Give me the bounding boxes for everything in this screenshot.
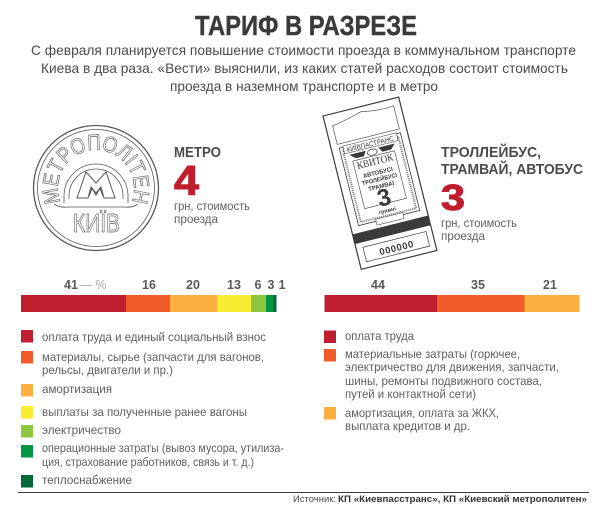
transport legend: шины, ремонты подвижного состава, [345, 374, 542, 388]
transport legend: выплата кредитов и др. [345, 419, 470, 433]
transport price caption: грн, стоимость [441, 216, 517, 230]
transport legend: материальные затраты (горючее, [345, 347, 520, 361]
metro legend [21, 330, 284, 488]
metro bar values: 41 [64, 278, 78, 292]
transport bar values [371, 278, 557, 292]
metro legend: операционные затраты (вывоз мусора, утилиза- [42, 441, 284, 455]
source: КП «Киевпасстранс», КП «Киевский метрополитен» [338, 494, 587, 505]
title: ТАРИФ В РАЗРЕЗЕ [195, 10, 417, 41]
transport legend: электричество для движения, запчасти, [345, 360, 559, 374]
intro text: проезда в наземном транспорте и в метро [170, 78, 438, 94]
transport bar values: 44 [371, 278, 385, 292]
icon: ticket [323, 97, 437, 269]
transport bar values: 35 [471, 278, 485, 292]
metro heading: МЕТРО [174, 144, 221, 161]
icon: ticket: гривні [378, 206, 397, 216]
transport legend: путей и контактной сети) [345, 387, 476, 401]
metro bar values: 1 [279, 278, 286, 292]
metro bar values: 20 [186, 278, 200, 292]
icon: ticket: 3 [374, 183, 394, 213]
metro stacked bar [21, 295, 276, 312]
metro price: 4 [174, 157, 200, 204]
transport legend [324, 329, 559, 433]
icon: ticket: ТРОЛЕЙБУСІ [361, 171, 398, 187]
intro text [31, 42, 576, 94]
metro bar values [64, 278, 286, 292]
metro bar values: 16 [142, 278, 156, 292]
icon: ticket: ТРАМВАЇ [368, 180, 395, 193]
metro legend: теплоснабжение [42, 473, 132, 487]
icon: ticket: АВТОБУСІ [362, 167, 394, 180]
metro legend: ция, страхование работников, связь и т. д.) [42, 455, 254, 469]
intro text: С февраля планируется повышение стоимости проезда в коммунальном транспорте [31, 42, 576, 58]
metro bar values: 13 [227, 278, 241, 292]
ticket number: 000000 [378, 239, 415, 258]
metro legend: рельсы, двигатели и пр.) [42, 363, 173, 377]
source: Источник: [293, 494, 336, 505]
metro legend: материалы, сырье (запчасти для вагонов, [42, 350, 264, 364]
transport price caption: проезда [441, 229, 485, 243]
transport legend: амортизация, оплата за ЖКХ, [345, 406, 499, 420]
metro price caption: грн, стоимость [174, 199, 250, 213]
ticket stripe [353, 216, 431, 244]
transport price: 3 [441, 177, 465, 218]
metro legend: электричество [42, 423, 121, 437]
metro price caption: проезда [174, 212, 218, 226]
metro legend: амортизация [42, 382, 112, 396]
transport price caption [441, 216, 517, 243]
metro bar values: 3 [268, 278, 275, 292]
intro text: Киева в два раза. «Вести» выяснили, из каких статей расходов состоит стоимость [41, 60, 568, 76]
metro bar values: 6 [255, 278, 262, 292]
transport heading: ТРАМВАЙ, АВТОБУС [441, 160, 583, 178]
transport stacked bar [324, 295, 580, 312]
transport legend: оплата труда [345, 329, 414, 343]
icon: metro token [32, 124, 160, 252]
ticket title: КВИТОК [356, 152, 395, 172]
metro price caption [174, 199, 250, 226]
icon: metro token: КИЇВ [73, 208, 120, 238]
token lettering: МЕТРОПОЛІТЕН [42, 134, 150, 204]
metro bar values: — % [79, 278, 107, 292]
metro legend: оплата труда и единый социальный взнос [42, 330, 266, 344]
ticket issuer: КИЇВПАСТРАНС [346, 135, 395, 154]
metro legend: выплаты за полученные ранее вагоны [42, 405, 247, 419]
transport heading [441, 143, 583, 178]
transport bar values: 21 [543, 278, 557, 292]
transport heading: ТРОЛЛЕЙБУС, [441, 143, 541, 161]
